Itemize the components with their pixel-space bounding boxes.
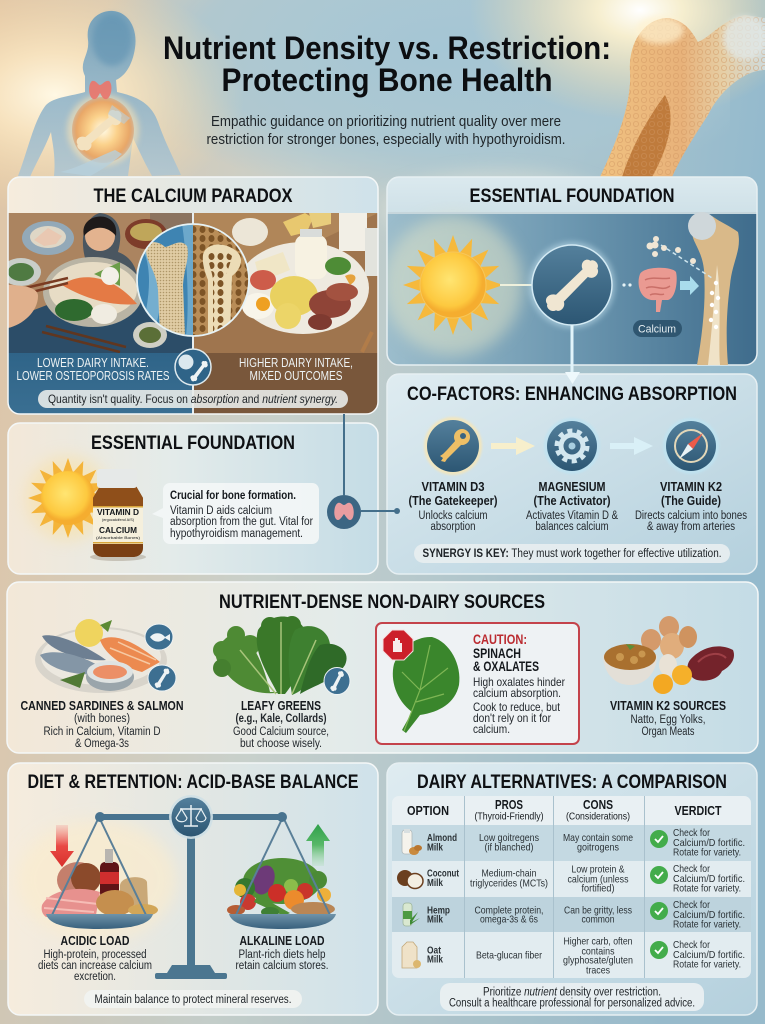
text: caution: calcium. bbox=[473, 722, 510, 736]
icon: key bbox=[424, 417, 482, 475]
icon: compass bbox=[663, 418, 719, 474]
label: calcium: Calcium bbox=[638, 324, 676, 336]
text: vitamin K2: & away from arteries bbox=[647, 521, 735, 533]
text: caution: High oxalates hinder bbox=[473, 675, 565, 689]
subtitle: restriction for stronger bones, especially with hypothyroidism. bbox=[206, 132, 566, 148]
callout: crucial for bone formation: Crucial for bone formation. bbox=[170, 490, 296, 502]
text: alkaline load: retain calcium stores. bbox=[236, 960, 328, 972]
label: calcium bbox=[633, 320, 682, 337]
table header row: OPTION bbox=[407, 803, 449, 818]
text: acidic load: diets can increase calcium bbox=[38, 960, 152, 972]
row: hemp milk: Rotate for variety. bbox=[673, 918, 741, 930]
panel: the calcium paradox bbox=[1, 177, 378, 414]
band labels: LOWER OSTEOPOROSIS RATES bbox=[16, 369, 170, 383]
text: caution: don't rely on it for bbox=[473, 711, 551, 725]
text: leafy greens: Good Calcium source, bbox=[233, 726, 329, 738]
connector: thyroid line bbox=[344, 414, 400, 514]
text: caution: CAUTION: bbox=[473, 632, 527, 647]
row: coconut milk: Coconut bbox=[427, 868, 459, 880]
icon: spinach leaf bbox=[393, 637, 459, 733]
illustration: sardines and salmon plate bbox=[35, 619, 167, 693]
row: oat milk bbox=[402, 936, 745, 976]
row: almond milk: goitrogens bbox=[577, 842, 619, 854]
subtitle: Empathic guidance on prioritizing nutrient quality over mere bbox=[211, 114, 561, 130]
callout: crucial for bone formation: hypothyroidism management. bbox=[170, 528, 303, 540]
band labels: HIGHER DAIRY INTAKE, bbox=[239, 356, 353, 370]
row: oat milk: Milk bbox=[427, 954, 443, 966]
row: oat milk: Beta-glucan fiber bbox=[476, 950, 542, 962]
band labels: LOWER DAIRY INTAKE. bbox=[37, 356, 149, 370]
arrow: gear to compass bbox=[610, 437, 653, 455]
table header row: CONS bbox=[583, 797, 613, 812]
panel: diet and retention bbox=[8, 763, 378, 1015]
row: coconut milk bbox=[397, 863, 745, 894]
text: magnesium: balances calcium bbox=[536, 521, 608, 533]
text: sardines and salmon: Rich in Calcium, Vitamin D bbox=[44, 726, 160, 738]
text: acidic load: High-protein, processed bbox=[44, 949, 146, 961]
text: sardines and salmon: (with bones) bbox=[74, 713, 130, 725]
icon: intestine bbox=[622, 268, 699, 312]
row: coconut milk: triglycerides (MCTs) bbox=[470, 878, 548, 890]
text: vitamin K2 sources: Organ Meats bbox=[642, 726, 695, 738]
illustration: leafy greens bbox=[213, 616, 347, 695]
text: acidic load bbox=[38, 934, 152, 983]
row: oat milk: Higher carb, often bbox=[564, 936, 633, 948]
text: caution: calcium absorption. bbox=[473, 686, 561, 700]
heading: the calcium paradox: THE CALCIUM PARADOX bbox=[94, 186, 293, 207]
text: vitamin K2 sources bbox=[610, 699, 726, 738]
row: hemp milk bbox=[403, 899, 745, 930]
photo: lower dairy Japanese meal bbox=[1, 213, 193, 353]
icon: bone in circle bbox=[529, 242, 615, 328]
row: hemp milk: Check for bbox=[673, 899, 710, 911]
title: Nutrient Density vs. Restriction: bbox=[163, 30, 611, 66]
row: hemp milk: Complete protein, bbox=[474, 904, 544, 916]
subtitle bbox=[206, 114, 566, 148]
row: almond milk: Milk bbox=[427, 842, 443, 854]
scale bbox=[46, 795, 336, 979]
header illustration: femur bone bbox=[600, 15, 765, 177]
callout: quantity isn't quality: Quantity isn't quality. Focus on absorption and nutrient synergy. bbox=[48, 392, 338, 406]
text: leafy greens bbox=[233, 699, 329, 750]
panel: essential foundation (sun to bone) bbox=[383, 177, 757, 365]
icon: bone badge bbox=[324, 668, 350, 694]
icon: globe and bone badge bbox=[175, 349, 211, 385]
callout: crucial for bone formation: absorption from the gut. Vital for bbox=[170, 516, 313, 528]
text: vitamin K2 bbox=[635, 480, 747, 533]
icon: gear bbox=[544, 418, 600, 474]
heading: diet and retention: DIET & RETENTION: ACID-BASE BALANCE bbox=[28, 772, 358, 793]
band labels bbox=[16, 356, 353, 383]
header illustration: human figure with thyroid and glowing bone bbox=[18, 11, 181, 177]
illustration: acidic food load bbox=[42, 849, 158, 917]
text: acidic load: ACIDIC LOAD bbox=[60, 934, 130, 948]
arrow: essential foundation to co-factors bbox=[565, 325, 580, 384]
row: almond milk: Almond bbox=[427, 832, 457, 844]
text: leafy greens: (e.g., Kale, Collards) bbox=[236, 713, 327, 725]
illustration: femur with calcium bbox=[688, 212, 739, 365]
panel: essential foundation (vitamin D) bbox=[8, 423, 378, 574]
title: Protecting Bone Health bbox=[222, 62, 552, 98]
row: coconut milk: Milk bbox=[427, 877, 443, 889]
text: vitamin D3: Unlocks calcium bbox=[418, 510, 488, 522]
text: vitamin D3 bbox=[408, 480, 498, 533]
row: oat milk: Rotate for variety. bbox=[673, 958, 741, 970]
row: hemp milk: Milk bbox=[427, 914, 443, 926]
icon: vitamin D and calcium bottle: (ergocalciferol A/S) bbox=[102, 517, 135, 522]
callout: crucial for bone formation: Vitamin D aids calcium bbox=[170, 505, 272, 517]
icon: thyroid badge bbox=[327, 495, 361, 529]
table header row: VERDICT bbox=[674, 803, 722, 818]
text: leafy greens: but choose wisely. bbox=[240, 738, 322, 750]
text: sardines and salmon bbox=[20, 699, 184, 750]
row: coconut milk: fortified) bbox=[582, 882, 614, 894]
title bbox=[163, 30, 611, 98]
panel: dairy alternatives comparison bbox=[387, 763, 757, 1015]
row: coconut milk: calcium (unless bbox=[568, 874, 628, 886]
row: almond milk: Low goitregens bbox=[479, 832, 539, 844]
table header row bbox=[407, 797, 722, 822]
row: hemp milk: common bbox=[582, 914, 615, 926]
text: caution: SPINACH bbox=[473, 646, 521, 661]
band labels: MIXED OUTCOMES bbox=[250, 369, 342, 383]
callout: maintain balance: Maintain balance to protect mineral reserves. bbox=[94, 994, 292, 1006]
icon: fish badge bbox=[145, 624, 173, 650]
callout: prioritize nutrient density: Consult a healthcare professional for personalized advice. bbox=[449, 998, 695, 1010]
row: coconut milk: Calcium/D fortific. bbox=[673, 873, 745, 885]
icon: sun bbox=[403, 235, 503, 335]
row: hemp milk: Calcium/D fortific. bbox=[673, 909, 745, 921]
heading: essential foundation: ESSENTIAL FOUNDATION bbox=[470, 186, 674, 207]
text: vitamin K2 sources: VITAMIN K2 SOURCES bbox=[610, 699, 726, 713]
icon: vitamin D and calcium bottle: (Absorbable Bones) bbox=[96, 535, 141, 540]
comparison table bbox=[392, 796, 751, 978]
row: oat milk: contains bbox=[582, 946, 614, 958]
text: vitamin K2: (The Guide) bbox=[661, 494, 721, 508]
row: almond milk bbox=[402, 827, 745, 858]
text: leafy greens: LEAFY GREENS bbox=[241, 699, 321, 713]
callout: synergy is key bbox=[414, 544, 730, 563]
row: oat milk: Oat bbox=[427, 944, 441, 956]
icon: stop hand bbox=[383, 630, 413, 660]
photo: higher dairy Western breakfast bbox=[193, 213, 378, 353]
icon: vitamin D and calcium bottle bbox=[90, 469, 146, 561]
panel: co-factors bbox=[387, 325, 757, 574]
row: coconut milk: Rotate for variety. bbox=[673, 882, 741, 894]
text: alkaline load: Plant-rich diets help bbox=[238, 949, 326, 961]
text: vitamin D3: VITAMIN D3 bbox=[422, 480, 485, 494]
row: hemp milk: Can be gritty, less bbox=[564, 904, 632, 916]
connector: sun to bone bbox=[500, 284, 532, 286]
table header row: (Thyroid-Friendly) bbox=[474, 810, 544, 822]
callout: caution spinach and oxalates bbox=[376, 623, 579, 744]
row: oat milk: traces bbox=[586, 964, 610, 976]
text: caution bbox=[473, 632, 565, 736]
illustration: alkaline food load bbox=[227, 858, 335, 917]
text: magnesium: (The Activator) bbox=[534, 494, 610, 508]
table header row: (Considerations) bbox=[566, 810, 630, 822]
text: alkaline load bbox=[236, 934, 328, 972]
table header row: PROS bbox=[495, 797, 523, 812]
row: oat milk: glyphosate/gluten bbox=[563, 954, 633, 966]
row: coconut milk: Check for bbox=[673, 863, 710, 875]
callout: prioritize nutrient density: Prioritize nutrient density over restriction. bbox=[483, 986, 661, 998]
text: vitamin K2: VITAMIN K2 bbox=[660, 480, 722, 494]
row: almond milk: Calcium/D fortific. bbox=[673, 837, 745, 849]
row: hemp milk: Hemp bbox=[427, 904, 450, 916]
row: oat milk: Check for bbox=[673, 939, 710, 951]
row: almond milk: Rotate for variety. bbox=[673, 846, 741, 858]
row: coconut milk: Medium-chain bbox=[482, 868, 537, 880]
icon: vitamin D and calcium bottle: VITAMIN D bbox=[97, 508, 139, 517]
text: alkaline load: ALKALINE LOAD bbox=[240, 934, 324, 948]
text: magnesium: MAGNESIUM bbox=[538, 480, 606, 494]
text: sardines and salmon: CANNED SARDINES & SALMON bbox=[20, 699, 184, 713]
row: oat milk: Calcium/D fortific. bbox=[673, 949, 745, 961]
callout: maintain balance bbox=[84, 990, 302, 1008]
row: almond milk: Check for bbox=[673, 827, 710, 839]
row: almond milk: May contain some bbox=[563, 832, 633, 844]
text: caution: & OXALATES bbox=[473, 659, 539, 674]
text: sardines and salmon: & Omega-3s bbox=[75, 738, 129, 750]
illustration: vitamin K2 foods bbox=[603, 616, 734, 694]
panel: nutrient-dense non-dairy sources bbox=[7, 582, 758, 753]
magnified bone circle bbox=[137, 224, 250, 336]
arrow: green up bbox=[306, 824, 330, 866]
arrow: key to gear bbox=[491, 437, 535, 455]
text: vitamin D3: absorption bbox=[430, 521, 476, 533]
text: magnesium bbox=[526, 480, 618, 533]
text: magnesium: Activates Vitamin D & bbox=[526, 510, 618, 522]
heading: essential foundation: ESSENTIAL FOUNDATION bbox=[91, 433, 295, 454]
icon: vitamin D and calcium bottle: CALCIUM bbox=[99, 525, 137, 535]
callout: synergy is key: SYNERGY IS KEY: They must work together for effective utilization. bbox=[422, 548, 722, 560]
text: acidic load: excretion. bbox=[74, 971, 116, 983]
row: hemp milk: omega-3s & 6s bbox=[480, 914, 538, 926]
callout: prioritize nutrient density bbox=[440, 983, 704, 1011]
icon: bone badge bbox=[148, 665, 176, 691]
icon: sun bbox=[26, 456, 110, 540]
row: almond milk: (if blanched) bbox=[484, 842, 534, 854]
text: vitamin D3: (The Gatekeeper) bbox=[408, 494, 498, 508]
callout: crucial for bone formation bbox=[152, 483, 319, 544]
calcium particles bbox=[646, 236, 712, 278]
heading: nutrient-dense sources: NUTRIENT-DENSE NON-DAIRY SOURCES bbox=[219, 592, 545, 613]
text: caution: Cook to reduce, but bbox=[473, 700, 561, 714]
text: vitamin K2 sources: Natto, Egg Yolks, bbox=[630, 714, 706, 726]
row: coconut milk: Low protein & bbox=[572, 864, 624, 876]
arrow: red down bbox=[50, 825, 74, 867]
